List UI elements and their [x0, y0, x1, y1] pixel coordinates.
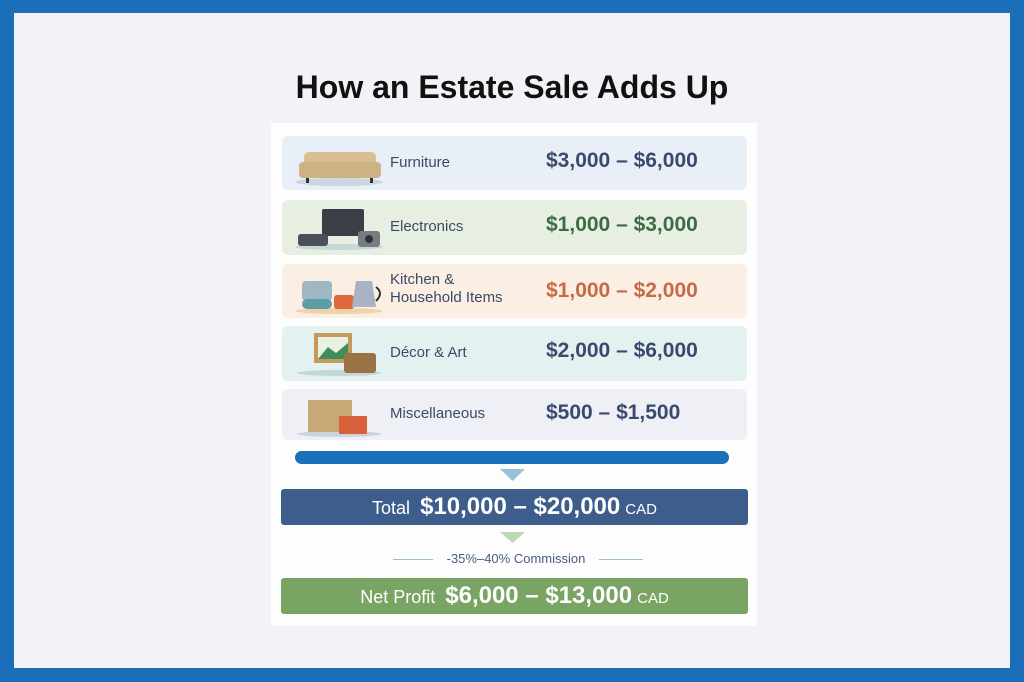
row: kitchen: Household Items — [390, 289, 503, 306]
row: misc — [282, 389, 747, 440]
icon: boxes — [297, 400, 381, 437]
row: furniture: $3,000 – $6,000 — [546, 149, 698, 172]
row: kitchen — [282, 264, 747, 318]
arrow: blue — [500, 469, 525, 481]
row: furniture: Furniture — [390, 154, 450, 171]
row: decor — [282, 326, 747, 381]
bar — [295, 451, 729, 464]
row: misc: Miscellaneous — [390, 405, 485, 422]
total box — [281, 489, 748, 525]
total box: Total $10,000 – $20,000 CAD — [372, 493, 657, 520]
net profit box: Net Profit $6,000 – $13,000 CAD — [360, 582, 669, 609]
row: decor: $2,000 – $6,000 — [546, 339, 698, 362]
row: electronics — [282, 200, 747, 255]
row: electronics: Electronics — [390, 218, 463, 235]
row: misc: $500 – $1,500 — [546, 401, 680, 424]
row: furniture — [282, 136, 747, 190]
row: kitchen: Kitchen & — [390, 271, 454, 288]
icon: easel and chest — [297, 333, 381, 376]
row: electronics: $1,000 – $3,000 — [546, 213, 698, 236]
row: kitchen: $1,000 – $2,000 — [546, 279, 698, 302]
commission: -35%–40% Commission — [447, 551, 585, 566]
title: How an Estate Sale Adds Up — [296, 69, 728, 105]
net profit box — [281, 578, 748, 614]
icon: tv — [295, 209, 383, 250]
panel: card — [271, 123, 757, 626]
icon: sofa — [295, 152, 383, 186]
row: decor: Décor & Art — [390, 344, 467, 361]
icon: dishes and kettle — [295, 281, 383, 314]
arrow: green — [500, 532, 525, 543]
